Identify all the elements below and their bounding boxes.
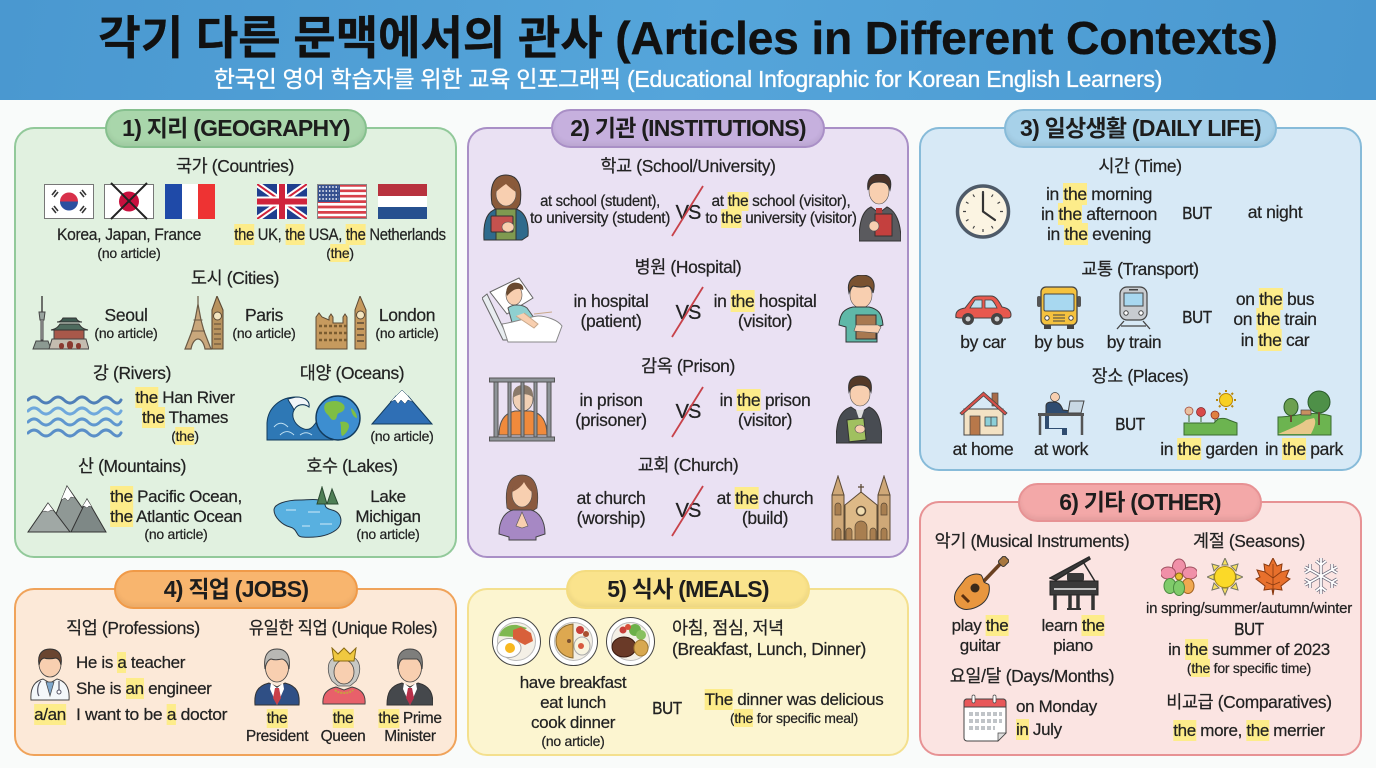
heading: meals: 5) 식사 (MEALS) [607,576,769,602]
text: Michigan: Michigan [355,507,421,526]
text: The dinner was delicious: The dinner was delicious [705,690,883,709]
icon: church building [832,475,890,540]
slash: hospital [671,286,704,338]
text: in the park: in the park [1265,439,1343,459]
text: but: BUT [1115,414,1145,434]
note: the for specific meal: (the for specific meal) [730,710,858,726]
panel: other [919,483,1362,756]
subheading: mountains: 산 (Mountains) [78,456,186,476]
panel: geography [14,109,457,558]
heading: jobs [114,570,358,609]
text: at church: at church [577,488,645,508]
subheading: lakes: 호수 (Lakes) [306,456,398,476]
icon: Seoul landmarks [32,296,89,350]
note: no article: (no article) [541,733,605,749]
icon: train [1116,286,1151,330]
text: rivers examples: the Han River [135,388,235,407]
header band [0,0,1376,100]
text: at the school: at the school (visitor), [712,193,850,210]
text: but: BUT [652,698,682,718]
text: but: BUT [1234,619,1264,639]
note: no article: (no article) [370,428,434,444]
panel: institutions [467,109,909,558]
label: a/an: a/an [34,705,66,724]
icon: flag of Korea [44,184,94,219]
text: in the summer of 2023: in the summer of 2023 [1168,640,1330,659]
text: in the afternoon: in the afternoon [1041,204,1157,224]
heading: meals [566,570,810,609]
icon: autumn leaf [1255,558,1291,596]
icon: spring flower [1161,558,1197,596]
text: in prison: in prison [580,390,642,410]
text: prisoner: (prisoner) [575,410,647,430]
subheading: seasons: 계절 (Seasons) [1193,531,1305,551]
subheading: unique roles: 유일한 직업 (Unique Roles) [249,618,437,638]
text: build: (build) [742,508,788,528]
note: no article: (no article) [232,325,296,341]
subheading: school: 학교 (School/University) [600,156,776,176]
text: in the garden: in the garden [1160,439,1258,459]
note: no article: (no article) [356,526,420,542]
heading: daily life: 3) 일상생활 (DAILY LIFE) [1020,115,1261,141]
icon: London landmarks [316,296,366,350]
text: Lake: Lake [370,487,406,506]
text: learn the: learn the [1041,616,1105,635]
panel: jobs [14,570,457,756]
slash: church [671,486,704,536]
text: on the train: on the train [1233,309,1317,329]
text: piano: piano [1053,636,1093,655]
text: by bus: by bus [1034,332,1084,352]
icon: lunch plate [548,616,599,667]
text: in the evening: in the evening [1047,224,1151,244]
icon: bus [1036,286,1082,329]
heading: daily life [1004,109,1277,148]
subheading: places: 장소 (Places) [1092,366,1188,386]
text: on the bus: on the bus [1236,289,1314,309]
heading: other: 6) 기타 (OTHER) [1059,489,1221,515]
text: in hospital: in hospital [574,291,648,311]
note: the for specific time: (the for specific time) [1187,660,1311,676]
heading: other [1018,483,1262,522]
text: visitor: (visitor) [738,311,792,331]
text: play the: play the [952,616,1008,635]
text: in the hospital: in the hospital [714,291,816,311]
text: eat lunch: eat lunch [540,693,606,712]
subheading: oceans: 대양 (Oceans) [300,363,404,383]
text: have breakfast: have breakfast [520,673,626,692]
text: but: BUT [1182,307,1212,327]
icon: Mount Fuji [371,390,433,424]
subtitle: 한국인 영어 학습자를 위한 교육 인포그래픽 (Educational Infographic for Korean English Learners) [214,66,1162,92]
text: oceans examples: the Pacific Ocean, [110,487,242,506]
subheading: church: 교회 (Church) [638,455,738,475]
panel: meals [467,570,909,756]
heading: geography [105,109,367,148]
subheading: days and months: 요일/달 (Days/Months) [950,666,1114,686]
icon: dinner plate [605,616,656,667]
subheading: comparatives: 비교급 (Comparatives) [1166,692,1332,712]
text: visitor: (visitor) [738,410,792,430]
icon: doctor [30,648,71,701]
comparison: vs: VS [676,500,700,522]
text: the Thames: the Thames [142,408,228,427]
text: the Prime: the Prime [378,710,442,727]
icon: mountains [27,485,107,532]
text: in the car: in the car [1241,330,1309,350]
text: the: the [267,710,287,727]
icon: flag of UK [257,184,307,219]
slash: prison [671,386,704,438]
heading: institutions [551,109,825,148]
icon: queen [322,647,366,705]
subheading: cities: 도시 (Cities) [191,268,279,288]
icon: prime minister [386,648,433,706]
icon: clock [955,184,1011,239]
icon: visiting teacher [859,174,901,242]
icon: flag of USA [317,184,367,219]
subheading: hospital: 병원 (Hospital) [635,257,741,277]
icon: guitar [953,556,1009,612]
icon: winter snowflake [1303,557,1339,595]
icon: river waves [27,395,122,438]
text: guitar: guitar [960,636,1000,655]
subheading: musical instruments: 악기 (Musical Instruments) [935,531,1129,551]
text: I want to be a doctor: I want to be a doctor [76,705,227,724]
icon: hospital visitor [838,275,884,342]
text: at night: at night [1248,202,1302,222]
text: Queen: Queen [321,728,365,745]
slash: school [671,186,704,236]
text: the countries: the UK, the USA, the Netherlands [234,225,446,244]
icon: breakfast plate [491,616,542,667]
comparison: vs: VS [676,302,700,324]
icon: calendar [963,694,1007,742]
icon: car [955,295,1012,326]
heading: institutions: 2) 기관 (INSTITUTIONS) [570,115,806,141]
icon: Paris landmarks [184,296,224,350]
icon: prison visitor [836,376,882,444]
text: to university: to university (student) [530,210,670,227]
text: by car: by car [960,332,1006,352]
text: in the prison: in the prison [720,390,810,410]
text: the more, the merrier: the more, the merrier [1173,721,1325,740]
text: the Atlantic Ocean: the Atlantic Ocean [110,507,242,526]
icon: flag of France [165,184,215,219]
icon: grand piano [1049,556,1101,612]
text: Seoul: Seoul [104,305,148,325]
icon: worshipper [498,474,546,540]
text: Minister: Minister [384,728,436,745]
note: the: (the) [326,245,354,261]
text: in July: in July [1016,720,1062,739]
icon: great wave and globe [266,395,361,441]
subheading: rivers: 강 (Rivers) [93,363,171,383]
text: in the morning: in the morning [1046,184,1152,204]
icon: person at desk [1037,392,1085,436]
text: meal names English: (Breakfast, Lunch, Dinner) [672,639,866,659]
subheading: time: 시간 (Time) [1098,156,1182,176]
text: at work: at work [1034,439,1088,459]
note: no article: (no article) [94,325,158,341]
text: worship: (worship) [577,508,645,528]
text: in seasons: in spring/summer/autumn/winter [1146,600,1352,617]
text: at home: at home [953,439,1013,459]
text: meal names Korean: 아침, 점심, 저녁 [672,618,784,638]
heading: jobs: 4) 직업 (JOBS) [164,576,308,602]
text: to the university: to the university (visitor) [705,210,857,227]
panel: daily life [919,109,1362,471]
icon: student [483,174,529,240]
text: at the church: at the church [717,488,813,508]
icon: prisoner behind bars [489,378,555,442]
subheading: professions: 직업 (Professions) [66,618,200,638]
note: no article: (no article) [144,526,208,542]
comparison: vs: VS [676,401,700,423]
subheading: countries: 국가 (Countries) [176,156,294,176]
text: Paris: Paris [245,305,283,325]
note: no article: (no article) [97,245,161,261]
text: no-article countries: Korea, Japan, France [57,225,201,244]
text: the: the [333,710,353,727]
heading: geography: 1) 지리 (GEOGRAPHY) [122,115,350,141]
icon: lake [274,486,342,538]
text: She is an engineer: She is an engineer [76,679,212,698]
note: the: (the) [171,428,199,444]
text: but: BUT [1182,203,1212,223]
title: 각기 다른 문맥에서의 관사 (Articles in Different Contexts) [98,12,1278,64]
note: no article: (no article) [375,325,439,341]
subheading: prison: 감옥 (Prison) [641,356,735,376]
text: at school: at school (student), [540,193,660,210]
text: London: London [379,305,435,325]
icon: hospital patient [482,277,562,342]
icon: summer sun [1207,558,1243,596]
icon: park [1277,390,1333,436]
icon: flag of Japan crossed out [104,182,154,220]
text: cook dinner: cook dinner [531,713,615,732]
text: on Monday: on Monday [1016,697,1097,716]
icon: president [254,648,300,706]
text: He is a teacher: He is a teacher [76,653,185,672]
subheading: transport: 교통 (Transport) [1081,259,1199,279]
text: President: President [246,728,308,745]
icon: flag of Netherlands [378,184,427,219]
text: patient: (patient) [580,311,642,331]
comparison: vs: VS [676,202,700,224]
icon: garden [1183,390,1238,436]
icon: house [959,391,1008,436]
text: by train: by train [1107,332,1161,352]
